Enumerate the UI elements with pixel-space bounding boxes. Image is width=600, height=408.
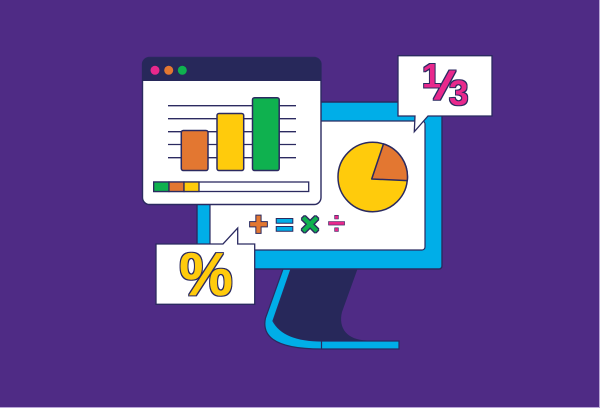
browser window with bar chart — [142, 58, 321, 204]
monitor — [197, 102, 442, 269]
monitor stand — [265, 269, 399, 349]
fraction text: 3 — [449, 74, 468, 113]
monitor screen — [210, 121, 425, 250]
math operators — [249, 205, 345, 242]
multiplication sign: × — [301, 206, 319, 242]
percent sign: % — [179, 241, 233, 308]
equals sign: = — [276, 208, 293, 242]
window control dots — [150, 66, 187, 75]
callout: percent — [156, 228, 255, 308]
bar chart — [181, 98, 279, 170]
window title bar — [142, 58, 321, 81]
fraction text: 1 — [422, 58, 441, 96]
fraction text — [422, 58, 468, 113]
fraction text: / — [434, 64, 456, 108]
progress bar — [154, 182, 309, 192]
plus sign: + — [249, 206, 268, 242]
division sign: ÷ — [328, 205, 345, 241]
callout: one third — [398, 56, 492, 132]
chart grid lines — [168, 106, 296, 158]
pie chart — [338, 142, 407, 212]
